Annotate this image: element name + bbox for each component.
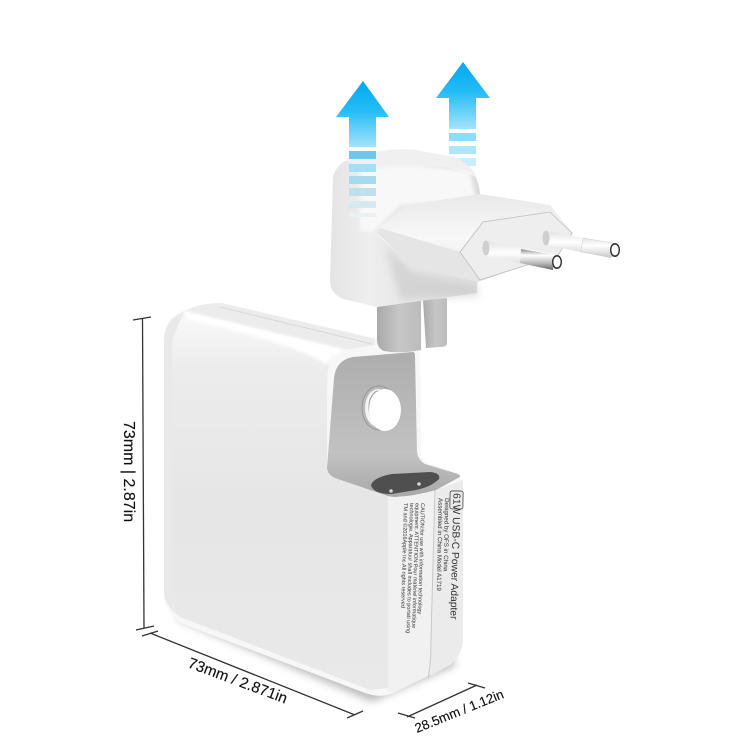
origin lines: Designed by OFS in China bbox=[442, 498, 450, 572]
dimension: height 73mm bbox=[133, 317, 154, 630]
side label text: TM and ©2016Apple Inc.All rights reserved bbox=[399, 503, 409, 608]
adapter silhouette bbox=[164, 303, 463, 696]
depth label: 28.5mm / 1.12in bbox=[413, 686, 506, 736]
product name: 61W USB-C Power Adapter bbox=[447, 493, 461, 620]
head shadow bbox=[385, 245, 478, 300]
top surface bbox=[184, 303, 375, 350]
caution lines: CAUTION:for use with information technology bbox=[416, 503, 425, 615]
arrow: right blue up arrow bbox=[436, 62, 490, 166]
width label: 73mm / 2.871in bbox=[186, 655, 290, 707]
front face bbox=[168, 318, 388, 690]
hexagonal plug face bbox=[460, 212, 572, 280]
socket bbox=[371, 472, 439, 494]
dimension: width 73mm bbox=[142, 631, 363, 718]
61W badge bbox=[450, 491, 463, 509]
arrow: left blue up arrow bbox=[336, 81, 389, 217]
recessed grey panel bbox=[327, 352, 460, 497]
dimension: depth 28.5mm bbox=[398, 683, 485, 718]
front pin bbox=[482, 240, 562, 270]
side label text: Assembled in China Model A1719 bbox=[435, 498, 443, 592]
rear pin bbox=[542, 230, 620, 258]
EU plug head bbox=[377, 194, 620, 300]
side face bbox=[388, 480, 463, 692]
height label: 73mm | 2.87in bbox=[120, 421, 137, 522]
power adapter body bbox=[164, 303, 463, 696]
wall plug housing bbox=[330, 149, 480, 307]
seam line bbox=[428, 490, 435, 678]
housing top bbox=[345, 149, 476, 177]
side label text bbox=[399, 491, 463, 633]
side label text: equipment. ATTENTION:Pour matériel informatique bbox=[410, 503, 419, 628]
prongs bbox=[377, 298, 447, 352]
plug head body bbox=[377, 194, 573, 282]
side label text: technologie. Apparatuur shall includes to portati using bbox=[405, 503, 414, 633]
magnetic stud bbox=[362, 386, 401, 431]
adapter shadow bbox=[178, 610, 455, 702]
